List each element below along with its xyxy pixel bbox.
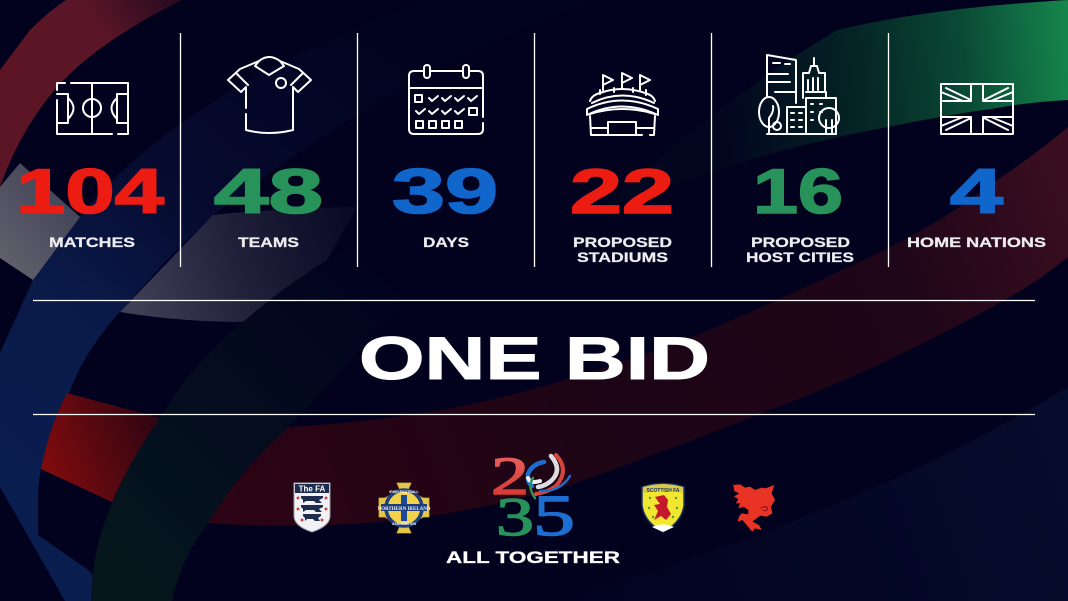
icon: football shirt — [228, 57, 311, 133]
label: proposed stadiums: STADIUMS — [577, 249, 668, 265]
label: teams: TEAMS — [238, 234, 299, 250]
crest: Northern Ireland: ASSOCIATION — [392, 522, 416, 526]
icon: football pitch — [57, 83, 128, 134]
tagline: all together: ALL TOGETHER — [446, 548, 620, 567]
stat: 22 stadiums — [570, 73, 674, 265]
icon: city skyline — [759, 55, 839, 134]
crest: England FA: The FA — [299, 484, 326, 494]
stat: 104 matches — [16, 83, 164, 250]
crest: Scotland — [642, 484, 684, 532]
heading: one bid: ONE BID — [359, 325, 710, 392]
stat: 48 teams — [214, 57, 323, 250]
digit 2: 2 — [491, 446, 529, 506]
crest: Northern Ireland — [377, 483, 431, 533]
icon: stadium with flags — [587, 73, 658, 135]
divider lines — [33, 33, 1035, 414]
label: proposed host cities: PROPOSED — [751, 234, 850, 250]
number: 104: 104 — [16, 157, 164, 227]
number: 16: 16 — [753, 157, 843, 227]
digit 5: 5 — [533, 483, 575, 548]
number: 22: 22 — [570, 157, 674, 227]
icon: calendar — [409, 65, 483, 134]
label: home nations: HOME NATIONS — [907, 234, 1046, 250]
label: proposed stadiums: PROPOSED — [573, 234, 672, 250]
number: 39: 39 — [392, 157, 498, 227]
logo: 2035 — [491, 446, 575, 548]
label: days: DAYS — [423, 234, 469, 250]
number: 48: 48 — [214, 157, 323, 227]
stat: 39 days — [392, 65, 498, 250]
stat: 16 host cities — [746, 55, 854, 265]
digit 3: 3 — [496, 487, 534, 547]
stat: 4 home nations — [907, 84, 1046, 250]
crest: Northern Ireland: NORTHERN IRELAND — [377, 507, 431, 512]
label: proposed host cities: HOST CITIES — [746, 249, 854, 265]
crest: Northern Ireland: IRISH FOOTBALL — [389, 490, 420, 494]
crest: Scotland: SCOTTISH FA — [646, 488, 680, 494]
crest: Wales dragon — [733, 484, 775, 532]
number: 4: 4 — [950, 157, 1003, 227]
label: matches: MATCHES — [49, 234, 135, 250]
crest: England FA — [294, 483, 330, 532]
swirl rings — [528, 455, 570, 498]
icon: union flag — [941, 84, 1013, 134]
